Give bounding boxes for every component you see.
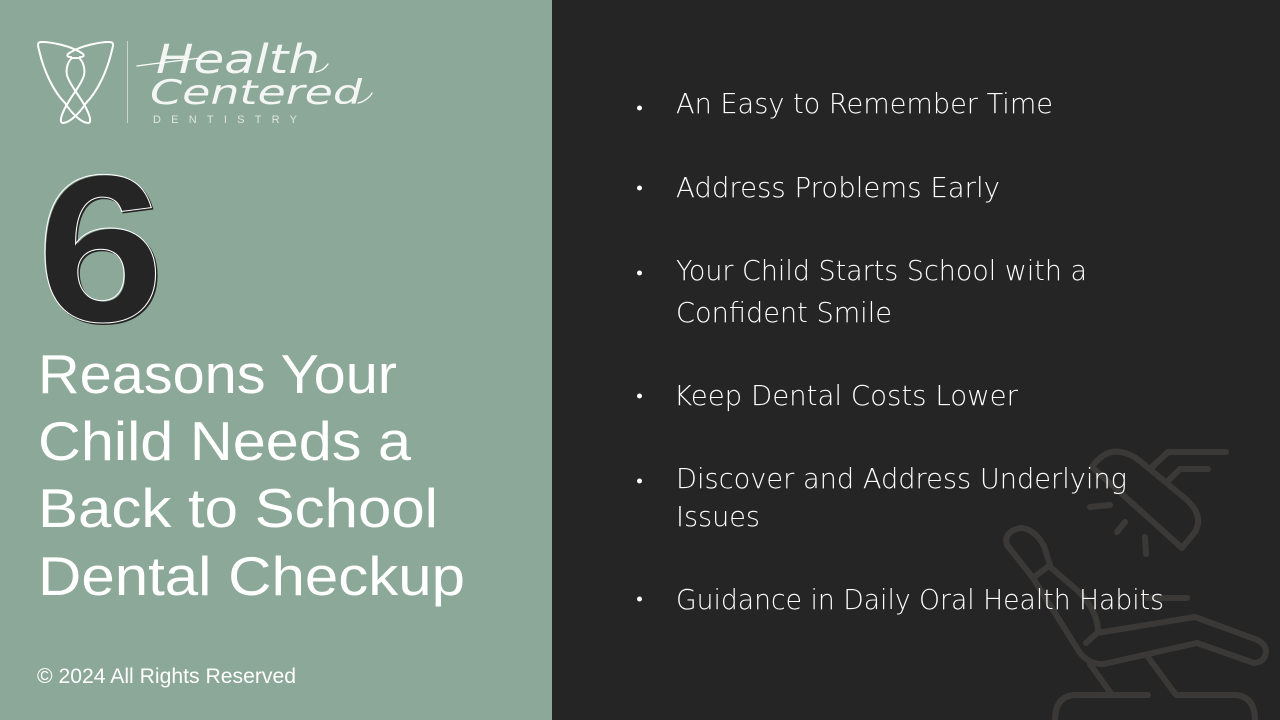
heading: [38, 343, 465, 607]
reason 4: Keep Dental Costs Lower: [674, 379, 1018, 412]
list of reasons: [637, 87, 1164, 616]
reason 3: [637, 254, 1087, 329]
reason 3: Confident Smile: [676, 296, 892, 329]
reason 2: Address Problems Early: [676, 171, 1000, 204]
logo word: Health: Health: [156, 37, 320, 83]
panel: dark right background: [552, 0, 1280, 720]
reason 1: An Easy to Remember Time: [676, 87, 1053, 120]
reason 3: Your Child Starts School with a: [676, 254, 1087, 287]
logo: Health Centered Dentistry: [38, 37, 372, 126]
reason 5: [637, 462, 1127, 533]
heading: Child Needs a: [38, 410, 411, 472]
logo word: Centered: Centered: [150, 73, 363, 113]
divider line: [127, 41, 128, 123]
big number 6: 6: [36, 131, 164, 366]
panel: green left background: [0, 0, 552, 720]
big number 6: 6: [38, 132, 165, 367]
heading: Reasons Your: [38, 343, 397, 405]
heading: Back to School: [38, 477, 438, 539]
logo word: Dentistry: DENTISTRY: [153, 114, 298, 126]
reason 5: Discover and Address Underlying: [676, 462, 1127, 495]
icon: tooth ribbon: [38, 42, 113, 123]
heading: Dental Checkup: [38, 545, 465, 607]
icon: dental chair watermark: [1006, 452, 1266, 720]
copyright footer: © 2024 All Rights Reserved: [37, 665, 296, 688]
reason 6: Guidance in Daily Oral Health Habits: [676, 583, 1164, 616]
reason 5: Issues: [676, 500, 760, 533]
